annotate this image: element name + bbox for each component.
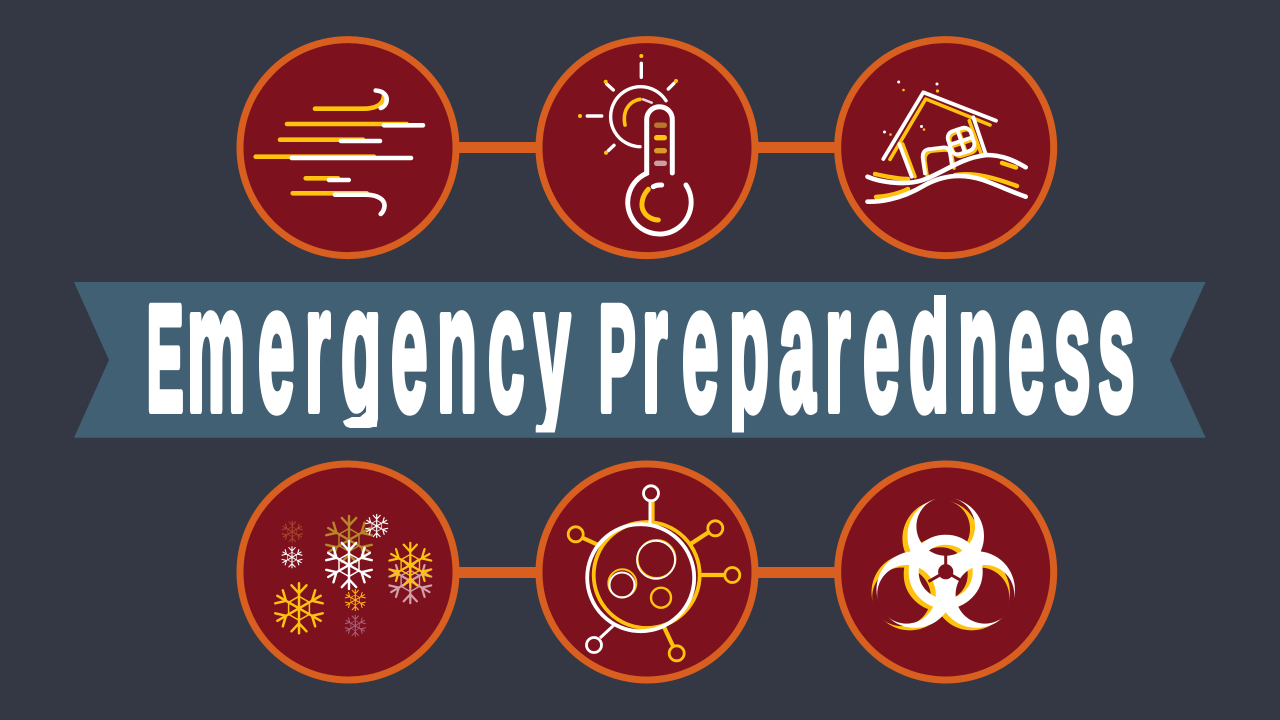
connector: heat to flood	[754, 142, 839, 153]
title	[148, 295, 1134, 432]
icon: snowflakes	[274, 514, 433, 636]
infographic canvas	[74, 36, 1206, 684]
connector: virus to biohazard	[754, 567, 839, 578]
icon: thermometer	[628, 107, 691, 234]
panel: flood	[838, 40, 1054, 256]
icon: virus	[568, 486, 740, 661]
panel: wind	[240, 40, 456, 256]
panel: biohazard	[838, 464, 1054, 680]
connector: snow to virus	[455, 567, 540, 578]
panel: extreme heat	[539, 40, 755, 256]
title: Emergency Preparedness	[147, 251, 1135, 448]
icon: sun	[578, 54, 678, 155]
icon: wind lines	[256, 90, 423, 214]
banner ribbon	[74, 282, 1206, 438]
icon: biohazard symbol	[872, 498, 1015, 630]
panel: snow	[240, 464, 456, 680]
icon: flooded house	[868, 80, 1026, 202]
panel: virus	[539, 464, 755, 680]
connector: wind to heat	[455, 142, 540, 153]
